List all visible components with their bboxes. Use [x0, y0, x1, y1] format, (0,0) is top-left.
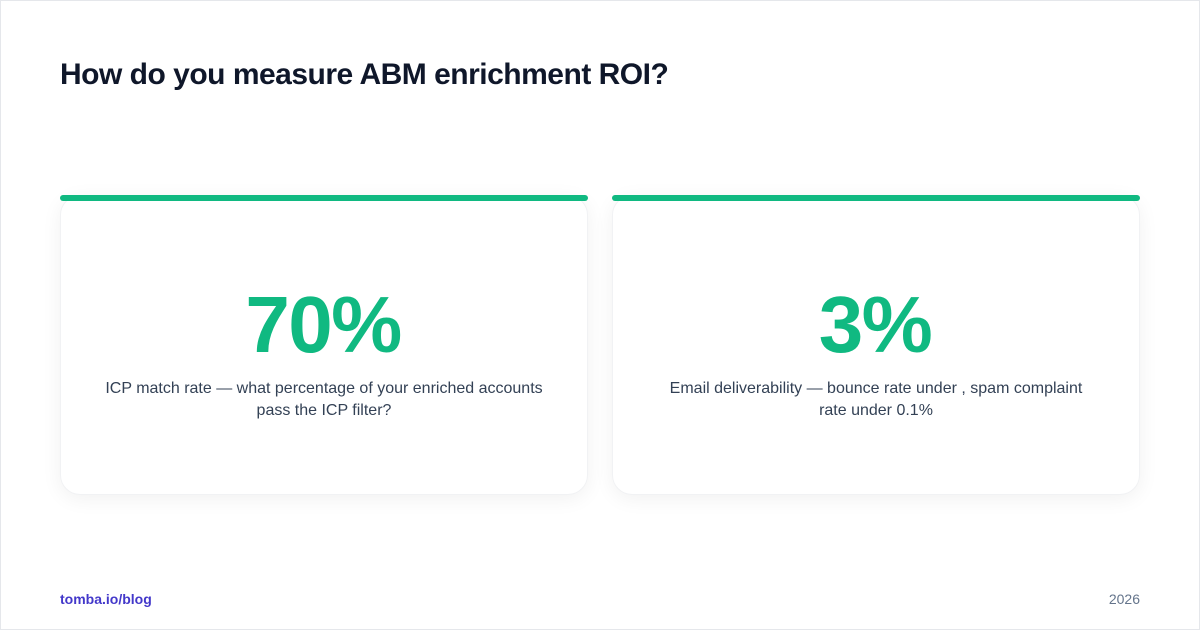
title: How do you measure ABM enrichment ROI? [60, 58, 668, 91]
description: ICP match rate: ICP match rate — what percentage of your enriched accounts [105, 380, 543, 397]
description: ICP match rate: pass the ICP filter? [257, 402, 391, 419]
stat: 70%: 70% [245, 280, 401, 369]
panel: email deliverability [612, 195, 1140, 496]
description: email deliverability: rate under 0.1% [819, 402, 933, 419]
description: ICP match rate [105, 380, 543, 419]
panel: ICP match rate [60, 195, 588, 496]
stat: 3%: 3% [819, 280, 931, 369]
description: email deliverability [670, 380, 1082, 419]
footer brand: tomba.io/blog [60, 591, 152, 607]
description: email deliverability: Email deliverability — bounce rate under , spam complaint [670, 380, 1082, 397]
card accent bar [612, 195, 1140, 201]
card background [612, 195, 1140, 495]
footer year: 2026 [1109, 591, 1140, 607]
card background [60, 195, 588, 495]
card accent bar [60, 195, 588, 201]
